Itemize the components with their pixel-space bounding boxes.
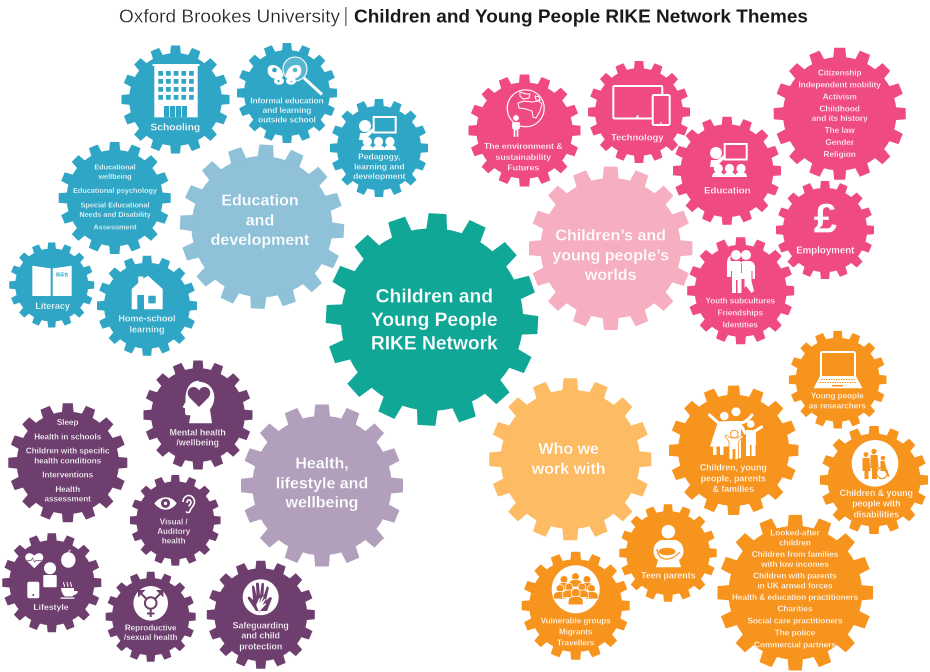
- gear: Mental health/wellbeing: Mental health: [170, 427, 226, 437]
- gear: Citizenship list: Religion: [824, 150, 856, 159]
- gear: Pedagogy, learning and development: [330, 99, 428, 197]
- icon: tablet and phone: [613, 86, 670, 125]
- gear: Sleep and health list: Health in schools: [34, 432, 102, 441]
- theme gear: Children's and young people's worlds: worlds: [584, 267, 637, 284]
- icon: parent holding baby: [654, 525, 684, 567]
- gear: The environment and sustainability: The environment &: [484, 141, 563, 151]
- gear: Educational wellbeing list: wellbeing: [97, 172, 132, 181]
- gear: Employment: [776, 181, 874, 279]
- icon: two friends: [727, 250, 755, 293]
- gear: Citizenship list: Gender: [825, 138, 855, 147]
- gear: Technology: [588, 61, 690, 163]
- theme gear: Children's and young people's worlds: [529, 167, 692, 330]
- theme gear: Children's and young people's worlds: Children’s and: [555, 228, 666, 245]
- gear: Sleep and health list: [8, 403, 127, 522]
- icon: butterfly and magnifying glass: [268, 57, 322, 94]
- gear: Young people as researchers: as researchers: [809, 402, 866, 411]
- gear: Technology: Technology: [611, 132, 664, 143]
- gear: Education (children's worlds): [673, 117, 781, 225]
- gear: Mental health/wellbeing: [144, 360, 252, 470]
- gear: Employment: Employment: [796, 245, 855, 256]
- theme gear: Who we work with: work with: [531, 461, 606, 478]
- gear: Children and young people with disabilities: [820, 426, 928, 534]
- theme gear: Health, lifestyle and wellbeing: lifestyle and: [276, 475, 368, 492]
- gear: Pedagogy, learning and development: development: [353, 171, 406, 181]
- gear: Sleep and health list: Children with specific: [26, 447, 110, 456]
- gear: Sleep and health list: Health: [55, 485, 80, 494]
- theme gear: Who we work with: [489, 378, 651, 540]
- gear: Children, young people, parents and families: people, parents: [701, 473, 766, 483]
- theme gear: Who we work with: Who we: [538, 441, 599, 458]
- gear: Vulnerable groups: Vulnerable groups: [541, 616, 611, 625]
- gear: Educational wellbeing list: Educational: [94, 162, 136, 171]
- gear: Children and young people with disabilities: disabilities: [854, 509, 899, 519]
- icon: school building: [152, 64, 200, 117]
- icon: globe with person: [507, 90, 544, 137]
- icon: family: [710, 407, 762, 460]
- gear: Young people as researchers: [789, 331, 886, 428]
- theme gear: Children's and young people's worlds: young people’s: [552, 248, 669, 265]
- gear: Children, young people, parents and families: [669, 386, 798, 515]
- icon: teacher and pupils: [359, 117, 396, 150]
- gear: Children and young people with disabilities: Children & young: [840, 488, 913, 498]
- gear: Educational wellbeing list: Educational psychology: [73, 186, 158, 195]
- gear: central network hub: RIKE Network: [371, 334, 498, 355]
- gear: Schooling: [122, 46, 230, 154]
- icon: hands: [243, 579, 279, 615]
- gear: Youth subcultures: [687, 237, 794, 344]
- gear: Reproductive/sexual health: [106, 572, 196, 662]
- gear: Looked-after children and partners list: with low incomes: [760, 560, 829, 569]
- gear: Youth subcultures: Friendships: [718, 308, 764, 317]
- icon: head with heart: [182, 381, 214, 423]
- gear: Looked-after children and partners list: The police: [775, 628, 816, 637]
- gear: Citizenship list: and its history: [812, 114, 868, 123]
- gear: Citizenship list: [774, 48, 906, 180]
- gear: Looked-after children and partners list: Children from families: [752, 550, 839, 559]
- gear: Educational wellbeing list: Special Educational: [81, 200, 149, 209]
- gear: Youth subcultures: Identities: [723, 320, 758, 329]
- gear: Teen parents: Teen parents: [641, 571, 696, 581]
- gear: Lifestyle: [2, 533, 101, 632]
- gear: Citizenship list: Childhood: [819, 104, 860, 113]
- gear: Educational wellbeing list: Needs and Disability: [79, 210, 152, 219]
- theme gear: Education and development: Education: [221, 193, 299, 210]
- icon: eye and ear: [154, 496, 194, 513]
- gear: Looked-after children and partners list: in UK armed forces: [757, 581, 833, 590]
- gear: Informal education: [237, 43, 337, 143]
- theme gear: Health, lifestyle and wellbeing: [241, 404, 403, 566]
- gear: Sleep and health list: health conditions: [34, 456, 102, 465]
- gear: Teen parents: [619, 504, 717, 602]
- gear: Sleep and health list: Sleep: [57, 418, 79, 427]
- gear: Literacy: Literacy: [35, 301, 70, 311]
- icon: open book: 阅读会: [56, 271, 69, 278]
- gear: Reproductive/sexual health: Reproductive: [125, 623, 177, 632]
- gear: Pedagogy, learning and development: Pedagogy,: [358, 151, 400, 161]
- icon: house: [132, 276, 163, 309]
- gear: Informal education: and learning: [263, 106, 311, 115]
- gear: Looked-after children and partners list: Children with parents: [753, 572, 837, 581]
- gear: Mental health/wellbeing: /wellbeing: [176, 438, 219, 448]
- gear: Children, young people, parents and families: Children, young: [700, 463, 767, 473]
- icon: lifestyle collection: [25, 550, 78, 599]
- gear: The environment and sustainability: [468, 74, 580, 186]
- gear: Lifestyle: Lifestyle: [33, 602, 69, 612]
- theme gear: Health, lifestyle and wellbeing: wellbeing: [285, 495, 358, 512]
- gear: Sleep and health list: assessment: [45, 495, 91, 504]
- gear: Literacy: [9, 242, 94, 328]
- icon: transgender symbol: [133, 586, 168, 621]
- icon: laptop: [814, 352, 862, 388]
- gear: Visual / Auditory health: Visual /: [160, 517, 188, 526]
- gear: Schooling: Schooling: [150, 123, 200, 134]
- gear: Looked-after children and partners list: Health & education practitioners: [732, 593, 858, 602]
- gear: Informal education: Informal education: [250, 96, 324, 105]
- gear: central network hub: [321, 208, 543, 431]
- theme gear: Health, lifestyle and wellbeing: Health,: [295, 456, 349, 473]
- icon: pound sign: £: [814, 194, 837, 242]
- gear: Educational wellbeing list: [59, 142, 171, 254]
- gear: Citizenship list: Independent mobility: [799, 80, 881, 89]
- gear: Vulnerable groups: Migrants: [559, 627, 593, 636]
- gear: Looked-after children and partners list: Social care practitioners: [747, 617, 843, 626]
- gear: Home-school learning: [97, 256, 197, 356]
- gear: Young people as researchers: Young people: [811, 392, 864, 401]
- gear: Citizenship list: Citizenship: [818, 68, 862, 77]
- gear: Vulnerable groups: Travellers: [557, 638, 595, 647]
- gear: Home-school learning: Home-school: [118, 314, 176, 324]
- gear: Safeguarding and child protection: Safeguarding: [233, 620, 289, 630]
- icon: family with wheelchair: [852, 440, 898, 487]
- theme gear: Education and development: development: [211, 232, 310, 249]
- gear: The environment and sustainability: sustainability: [496, 152, 551, 162]
- gear: Informal education: outside school: [258, 115, 316, 124]
- gear: Looked-after children and partners list: children: [779, 538, 811, 547]
- icon: crowd of people: [552, 565, 600, 613]
- gear: Educational wellbeing list: Assessment: [94, 222, 137, 231]
- gear: Children, young people, parents and families: & families: [713, 484, 754, 494]
- title: Oxford Brookes University: [119, 6, 341, 26]
- gear: Visual / Auditory health: Auditory: [157, 527, 191, 536]
- gear: central network hub: Young People: [371, 310, 498, 331]
- theme gear: Education and development: [176, 141, 348, 313]
- gear: Looked-after children and partners list: Charities: [777, 605, 813, 614]
- gear: Safeguarding and child protection: protection: [239, 641, 282, 651]
- title: [119, 6, 808, 26]
- gear: Children and young people with disabilities: people with: [852, 499, 900, 509]
- gear: Safeguarding and child protection: [207, 561, 315, 669]
- gear: Education (children's worlds): Education: [704, 185, 751, 196]
- gear: Sleep and health list: Interventions: [42, 471, 94, 480]
- gear: Visual / Auditory health: health: [162, 537, 186, 546]
- gear: Visual / Auditory health: [130, 475, 221, 566]
- gear: Reproductive/sexual health: /sexual health: [124, 633, 178, 642]
- icon: teacher and pupils: [710, 144, 747, 177]
- gear: Home-school learning: learning: [129, 324, 165, 334]
- gear: Vulnerable groups: [522, 552, 630, 660]
- gear: Citizenship list: The law: [825, 126, 855, 135]
- gear: Looked-after children and partners list: Commercial partners: [754, 640, 836, 649]
- gear: Youth subcultures: Youth subcultures: [705, 296, 776, 305]
- gear: Citizenship list: Activism: [823, 92, 857, 101]
- gear: central network hub: Children and: [376, 286, 493, 307]
- gear: Pedagogy, learning and development: learning and: [354, 161, 405, 171]
- gear: Looked-after children and partners list: Looked-after: [770, 529, 821, 538]
- gear: Safeguarding and child protection: and child: [241, 631, 280, 641]
- theme gear: Education and development: and: [246, 213, 274, 230]
- title: Children and Young People RIKE Network Themes: [354, 6, 808, 26]
- gear: Looked-after children and partners list: [718, 515, 873, 670]
- gear: The environment and sustainability: Futures: [507, 163, 539, 173]
